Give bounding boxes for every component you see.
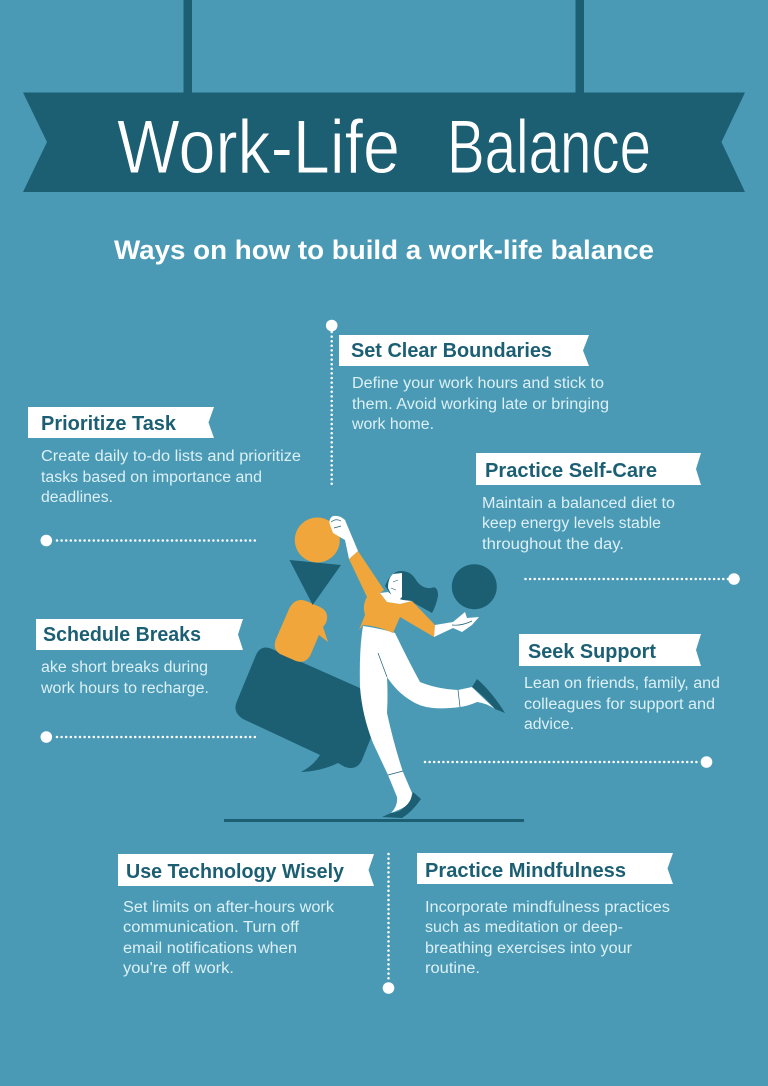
collar: [380, 592, 412, 604]
block: set clear boundaries: work home.: [351, 416, 434, 433]
block: use technology wisely: email notifications when: [123, 940, 297, 957]
pants: [360, 626, 495, 813]
block: use technology wisely: you're off work.: [123, 960, 234, 977]
connector: bottom: [383, 854, 394, 994]
speech bubble: orange: [275, 600, 328, 662]
block: set clear boundaries: Set Clear Boundaries: [351, 340, 552, 362]
connector: set clear boundaries: [326, 320, 338, 484]
block: set clear boundaries: them. Avoid working late or bringing: [352, 396, 609, 413]
block: prioritize task: deadlines.: [41, 489, 113, 506]
connector: seek support: [425, 756, 712, 768]
block: schedule breaks: ake short breaks during: [41, 659, 208, 676]
title banner: [23, 0, 745, 192]
front shoe: [382, 792, 421, 818]
pants seams: [378, 653, 460, 775]
block: schedule breaks: Schedule Breaks: [43, 624, 201, 646]
block: seek support: Seek Support: [528, 641, 656, 663]
orange circle: [295, 518, 340, 562]
hand detail: [331, 520, 341, 528]
block: practice self-care: keep energy levels stable: [482, 515, 661, 532]
open hand detail: [452, 621, 472, 625]
subtitle: Ways on how to build a work-life balance: [114, 235, 654, 265]
open hand: [434, 612, 479, 637]
block: use technology wisely: Set limits on after-hours work: [123, 899, 334, 916]
ground line: [224, 819, 524, 822]
block: schedule breaks: work hours to recharge.: [40, 680, 209, 697]
hair: [385, 571, 438, 613]
block: use technology wisely: communication. Turn off: [123, 919, 300, 936]
connector: prioritize task: [40, 535, 256, 546]
block: seek support: advice.: [524, 716, 574, 733]
block: prioritize task: Prioritize Task: [41, 413, 177, 435]
block: use technology wisely: Use Technology Wisely: [126, 861, 345, 883]
block: practice mindfulness: breathing exercises into your: [425, 940, 632, 957]
block: prioritize task: [28, 407, 301, 506]
sweater: [349, 551, 435, 637]
title: [117, 105, 651, 190]
connector: schedule breaks: [40, 731, 256, 743]
block: practice mindfulness: Incorporate mindfulness practices: [425, 899, 670, 916]
face: [388, 573, 402, 600]
title: Work-Life: [117, 105, 400, 190]
triangle: [290, 560, 341, 605]
block: set clear boundaries: [339, 335, 609, 433]
face detail: [391, 580, 398, 590]
block: prioritize task: tasks based on importance and: [41, 469, 262, 486]
speech bubble: dark: [235, 647, 380, 772]
block: practice mindfulness: [417, 853, 673, 977]
block: practice mindfulness: Practice Mindfulness: [425, 860, 626, 882]
block: set clear boundaries: Define your work hours and stick to: [352, 375, 604, 392]
block: use technology wisely: [118, 854, 374, 977]
block: seek support: colleagues for support and: [524, 696, 715, 713]
block: practice self-care: Maintain a balanced diet to: [482, 495, 675, 512]
block: schedule breaks: [36, 619, 243, 697]
back shoe: [472, 679, 505, 713]
block: practice mindfulness: such as meditation or deep-: [425, 919, 623, 936]
connector: practice self-care: [526, 573, 740, 585]
block: practice self-care: Practice Self-Care: [485, 460, 657, 482]
block: practice mindfulness: routine.: [425, 960, 480, 977]
block: practice self-care: throughout the day.: [482, 536, 624, 553]
block: seek support: [519, 634, 720, 733]
illustration: woman balancing shapes: [224, 516, 524, 822]
block: practice self-care: [476, 453, 701, 553]
raised hand: [329, 516, 358, 559]
block: seek support: Lean on friends, family, and: [524, 675, 720, 692]
block: prioritize task: Create daily to-do lists and prioritize: [41, 448, 301, 465]
title: Balance: [447, 105, 651, 190]
dark circle: [452, 564, 497, 609]
